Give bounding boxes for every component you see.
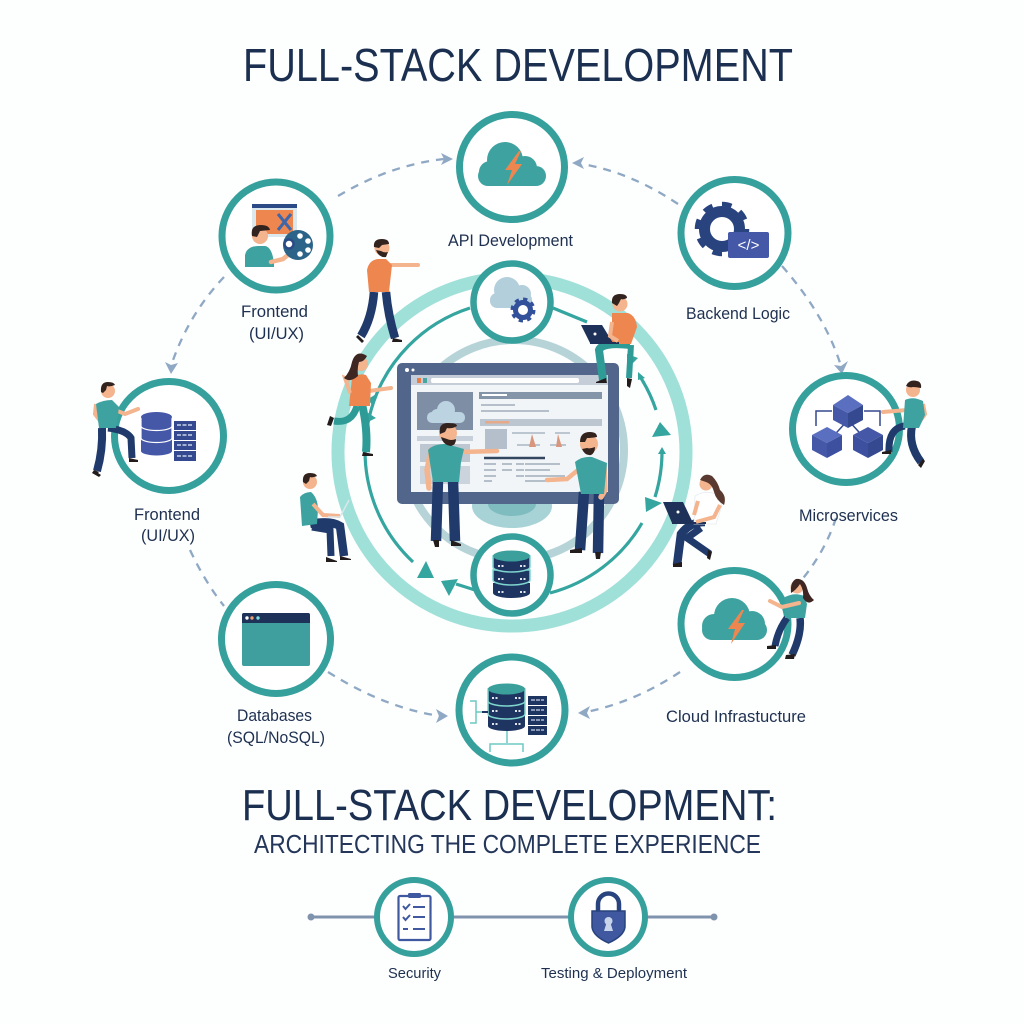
central monitor dashboard — [397, 363, 619, 504]
node: Cloud Infrastructure — [681, 570, 788, 678]
person: seated woman with laptop — [663, 475, 725, 567]
label: Frontend UI/UX — [241, 303, 308, 343]
label: Backend Logic: Backend Logic — [686, 305, 790, 323]
person: seated man in teal with laptop — [300, 473, 351, 562]
label: Frontend UI/UX left: (UI/UX) — [141, 527, 195, 545]
label: Microservices: Microservices — [799, 507, 898, 525]
bottom title: FULL-STACK DEVELOPMENT: — [242, 781, 777, 830]
label: Frontend UI/UX: (UI/UX) — [249, 325, 304, 343]
dashed flow arrows between outer nodes — [165, 153, 848, 723]
node: Security checklist — [377, 880, 451, 954]
node: browser window — [222, 584, 330, 694]
label: Databases SQL/NoSQL: (SQL/NoSQL) — [227, 729, 325, 747]
node: Backend Logic: </> — [738, 237, 760, 254]
node: Frontend UI/UX with designer — [222, 182, 330, 290]
central thin ring arcs with arrow markers — [365, 308, 671, 596]
label: Testing and Deployment: Testing & Deployment — [541, 965, 688, 982]
label: API Development: API Development — [448, 232, 573, 250]
person: woman in teal beside cloud node — [767, 579, 814, 659]
label: Cloud Infrastucture: Cloud Infrastucture — [666, 708, 806, 726]
node: Microservices — [792, 376, 900, 482]
monitor backdrop ring and stand — [404, 340, 624, 560]
title: FULL-STACK DEVELOPMENT — [243, 39, 793, 91]
person: man in orange with laptop — [581, 294, 637, 388]
bottom inner node — [474, 536, 550, 614]
bottom timeline connector — [308, 914, 718, 920]
person: man in teal beside database node — [92, 382, 138, 477]
label: Security: Security — [388, 965, 441, 982]
person: woman in orange running — [327, 354, 391, 456]
label: Frontend UI/UX left — [134, 506, 200, 545]
label: Databases SQL/NoSQL — [227, 707, 325, 747]
node: bottom database server — [459, 657, 565, 763]
node: Testing padlock — [571, 880, 645, 954]
label: Frontend UI/UX left: Frontend — [134, 506, 200, 524]
label: Frontend UI/UX: Frontend — [241, 303, 308, 321]
top inner node — [474, 264, 550, 340]
central outer ring — [338, 278, 686, 626]
node: Backend Logic — [681, 180, 788, 286]
subtitle: ARCHITECTING THE COMPLETE EXPERIENCE — [254, 829, 761, 859]
person: presenter left pointing at screen — [427, 423, 497, 547]
person: presenter right gesturing — [547, 432, 607, 559]
node: API Development — [460, 114, 564, 220]
person: bearded man in orange pointing — [356, 239, 418, 343]
label: Databases SQL/NoSQL: Databases — [237, 707, 312, 725]
person: man in teal beside microservices node — [882, 381, 925, 468]
node: Databases left — [114, 382, 224, 490]
